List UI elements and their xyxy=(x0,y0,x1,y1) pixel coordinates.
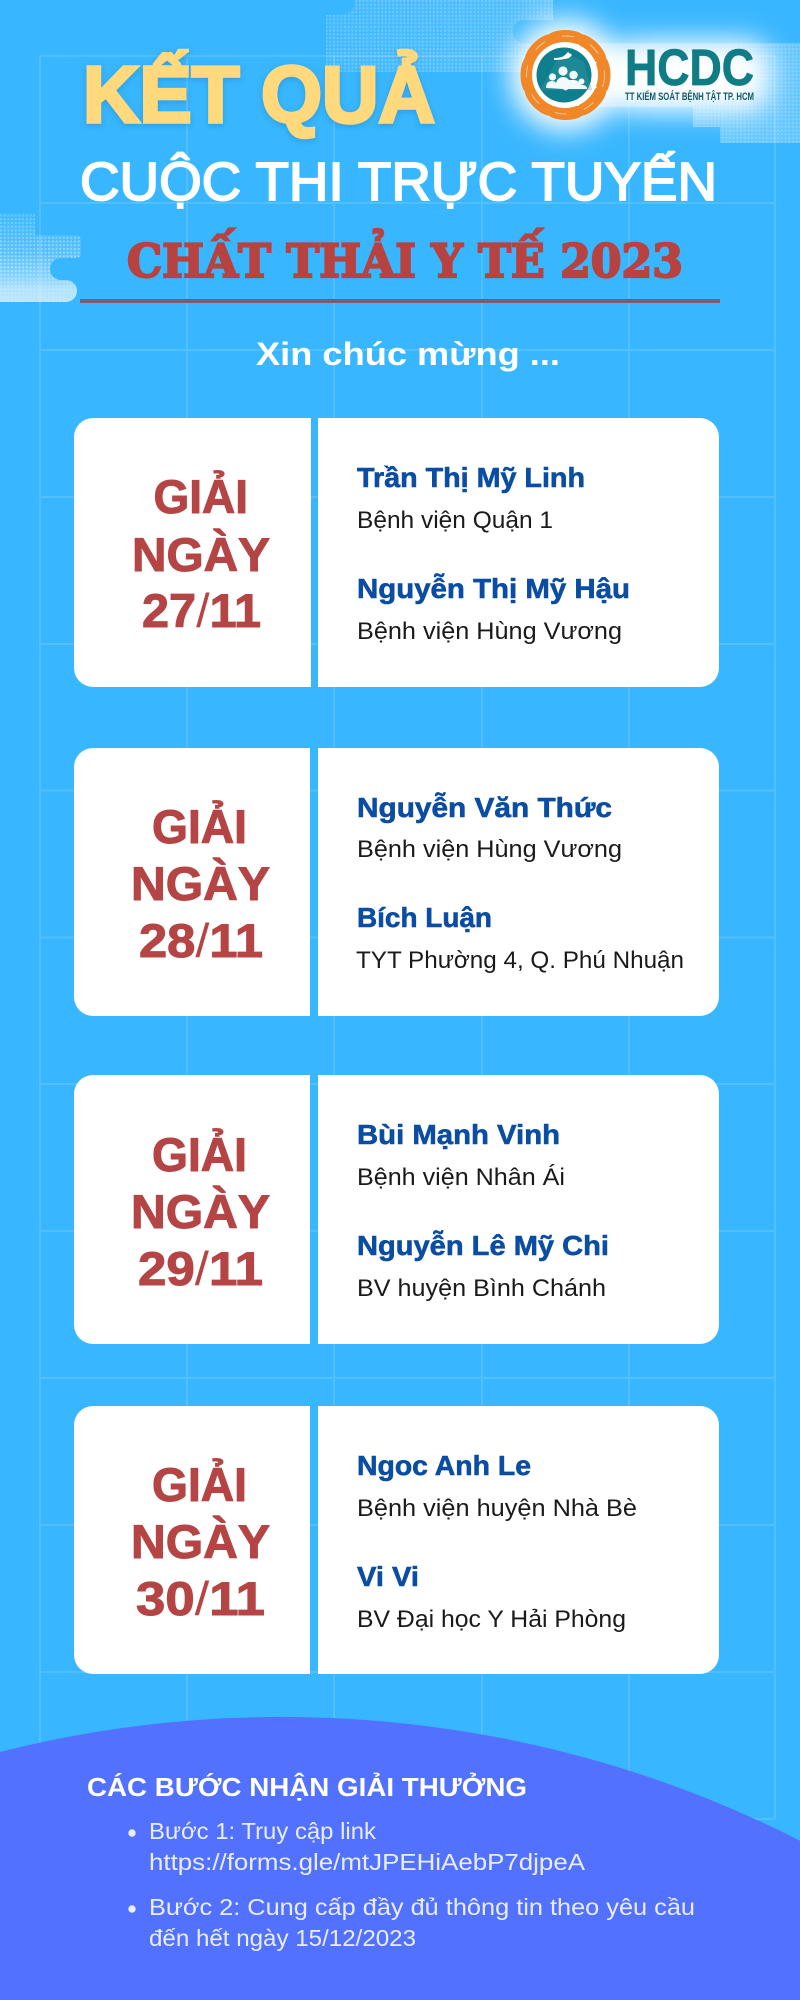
icon: orange ring emblem xyxy=(520,30,611,120)
card left: date: NGÀY xyxy=(131,857,270,910)
step 2: Bước 2: Cung cấp đầy đủ thông tin theo yêu cầu xyxy=(149,1894,695,1920)
card right: winners: Ngoc Anh Le xyxy=(357,1450,531,1481)
logo wordmark: HCDC xyxy=(625,39,754,96)
card left: date: GIẢI xyxy=(152,1458,247,1511)
card right: winners: Bích Luận xyxy=(357,902,492,933)
title underline xyxy=(80,299,720,303)
card right: winners: Nguyễn Lê Mỹ Chi xyxy=(357,1230,609,1261)
footer heading: CÁC BƯỚC NHẬN GIẢI THƯỞNG xyxy=(87,1771,527,1802)
decorative cloud: left xyxy=(0,213,81,302)
panel: prize claim steps xyxy=(0,1717,800,2000)
card left: date xyxy=(74,1075,310,1344)
card left: date: NGÀY xyxy=(132,528,270,581)
logo glow xyxy=(510,19,770,131)
card right: winners: Bệnh viện Hùng Vương xyxy=(357,618,622,645)
card left: date: NGÀY xyxy=(131,1185,270,1238)
card right: winners: Bệnh viện Nhân Ái xyxy=(357,1164,565,1191)
panel: prize 29/11 xyxy=(74,1075,719,1344)
card right: winners: Bệnh viện Hùng Vương xyxy=(357,836,622,863)
HCDC logo xyxy=(520,30,754,120)
subtitle: Xin chúc mừng: Xin chúc mừng ... xyxy=(256,336,560,372)
card right: winners: Bệnh viện huyện Nhà Bè xyxy=(357,1495,637,1522)
card right: winners: Trần Thị Mỹ Linh xyxy=(357,462,585,493)
card left: date: GIẢI xyxy=(152,800,247,853)
card right: winners xyxy=(318,1406,719,1674)
card left: date: GIẢI xyxy=(152,1128,247,1181)
card right: winners: BV Đại học Y Hải Phòng xyxy=(357,1606,626,1633)
card left: date xyxy=(74,748,310,1016)
decorative cloud: top right xyxy=(326,0,800,143)
card right: winners: TYT Phường 4, Q. Phú Nhuận xyxy=(356,947,684,974)
card right: winners: Vi Vi xyxy=(357,1561,419,1592)
card right: winners: Bệnh viện Quận 1 xyxy=(357,507,553,534)
step 2: đến hết ngày 15/12/2023 xyxy=(149,1925,416,1951)
step 1: https://forms.gle/mtJPEHiAebP7djpeA xyxy=(149,1849,586,1875)
card left: date xyxy=(74,1406,310,1674)
card left: date: 29/11 xyxy=(138,1242,263,1295)
card left: date: NGÀY xyxy=(131,1515,270,1568)
footer background curve xyxy=(0,1717,800,2000)
title: CHẤT THẢI Y TẾ 2023: CHẤT THẢI Y TẾ 2023 xyxy=(127,227,683,288)
card right: winners xyxy=(318,748,719,1016)
card left: date: 27/11 xyxy=(142,584,261,637)
card right: winners: BV huyện Bình Chánh xyxy=(357,1275,606,1302)
step 1: Bước 1: Truy cập link xyxy=(149,1818,377,1844)
title: KẾT QUẢ: KẾT QUẢ xyxy=(83,50,435,139)
panel: prize 27/11 xyxy=(74,418,719,687)
step 1 xyxy=(128,1818,586,1875)
card right: winners: Nguyễn Thị Mỹ Hậu xyxy=(357,573,630,604)
card right: winners xyxy=(318,418,719,687)
card left: date: GIẢI xyxy=(154,470,248,523)
card left: date: 28/11 xyxy=(139,914,263,967)
card right: winners xyxy=(318,1075,719,1344)
panel: prize 28/11 xyxy=(74,748,719,1016)
card right: winners: Bùi Mạnh Vinh xyxy=(357,1119,560,1150)
panel: prize 30/11 xyxy=(74,1406,719,1674)
card right: winners: Nguyễn Văn Thức xyxy=(357,792,612,823)
step 2 xyxy=(128,1894,695,1951)
title: CUỘC THI TRỰC TUYẾN: CUỘC THI TRỰC TUYẾN xyxy=(80,152,717,212)
card left: date xyxy=(74,418,311,687)
card left: date: 30/11 xyxy=(136,1572,265,1625)
